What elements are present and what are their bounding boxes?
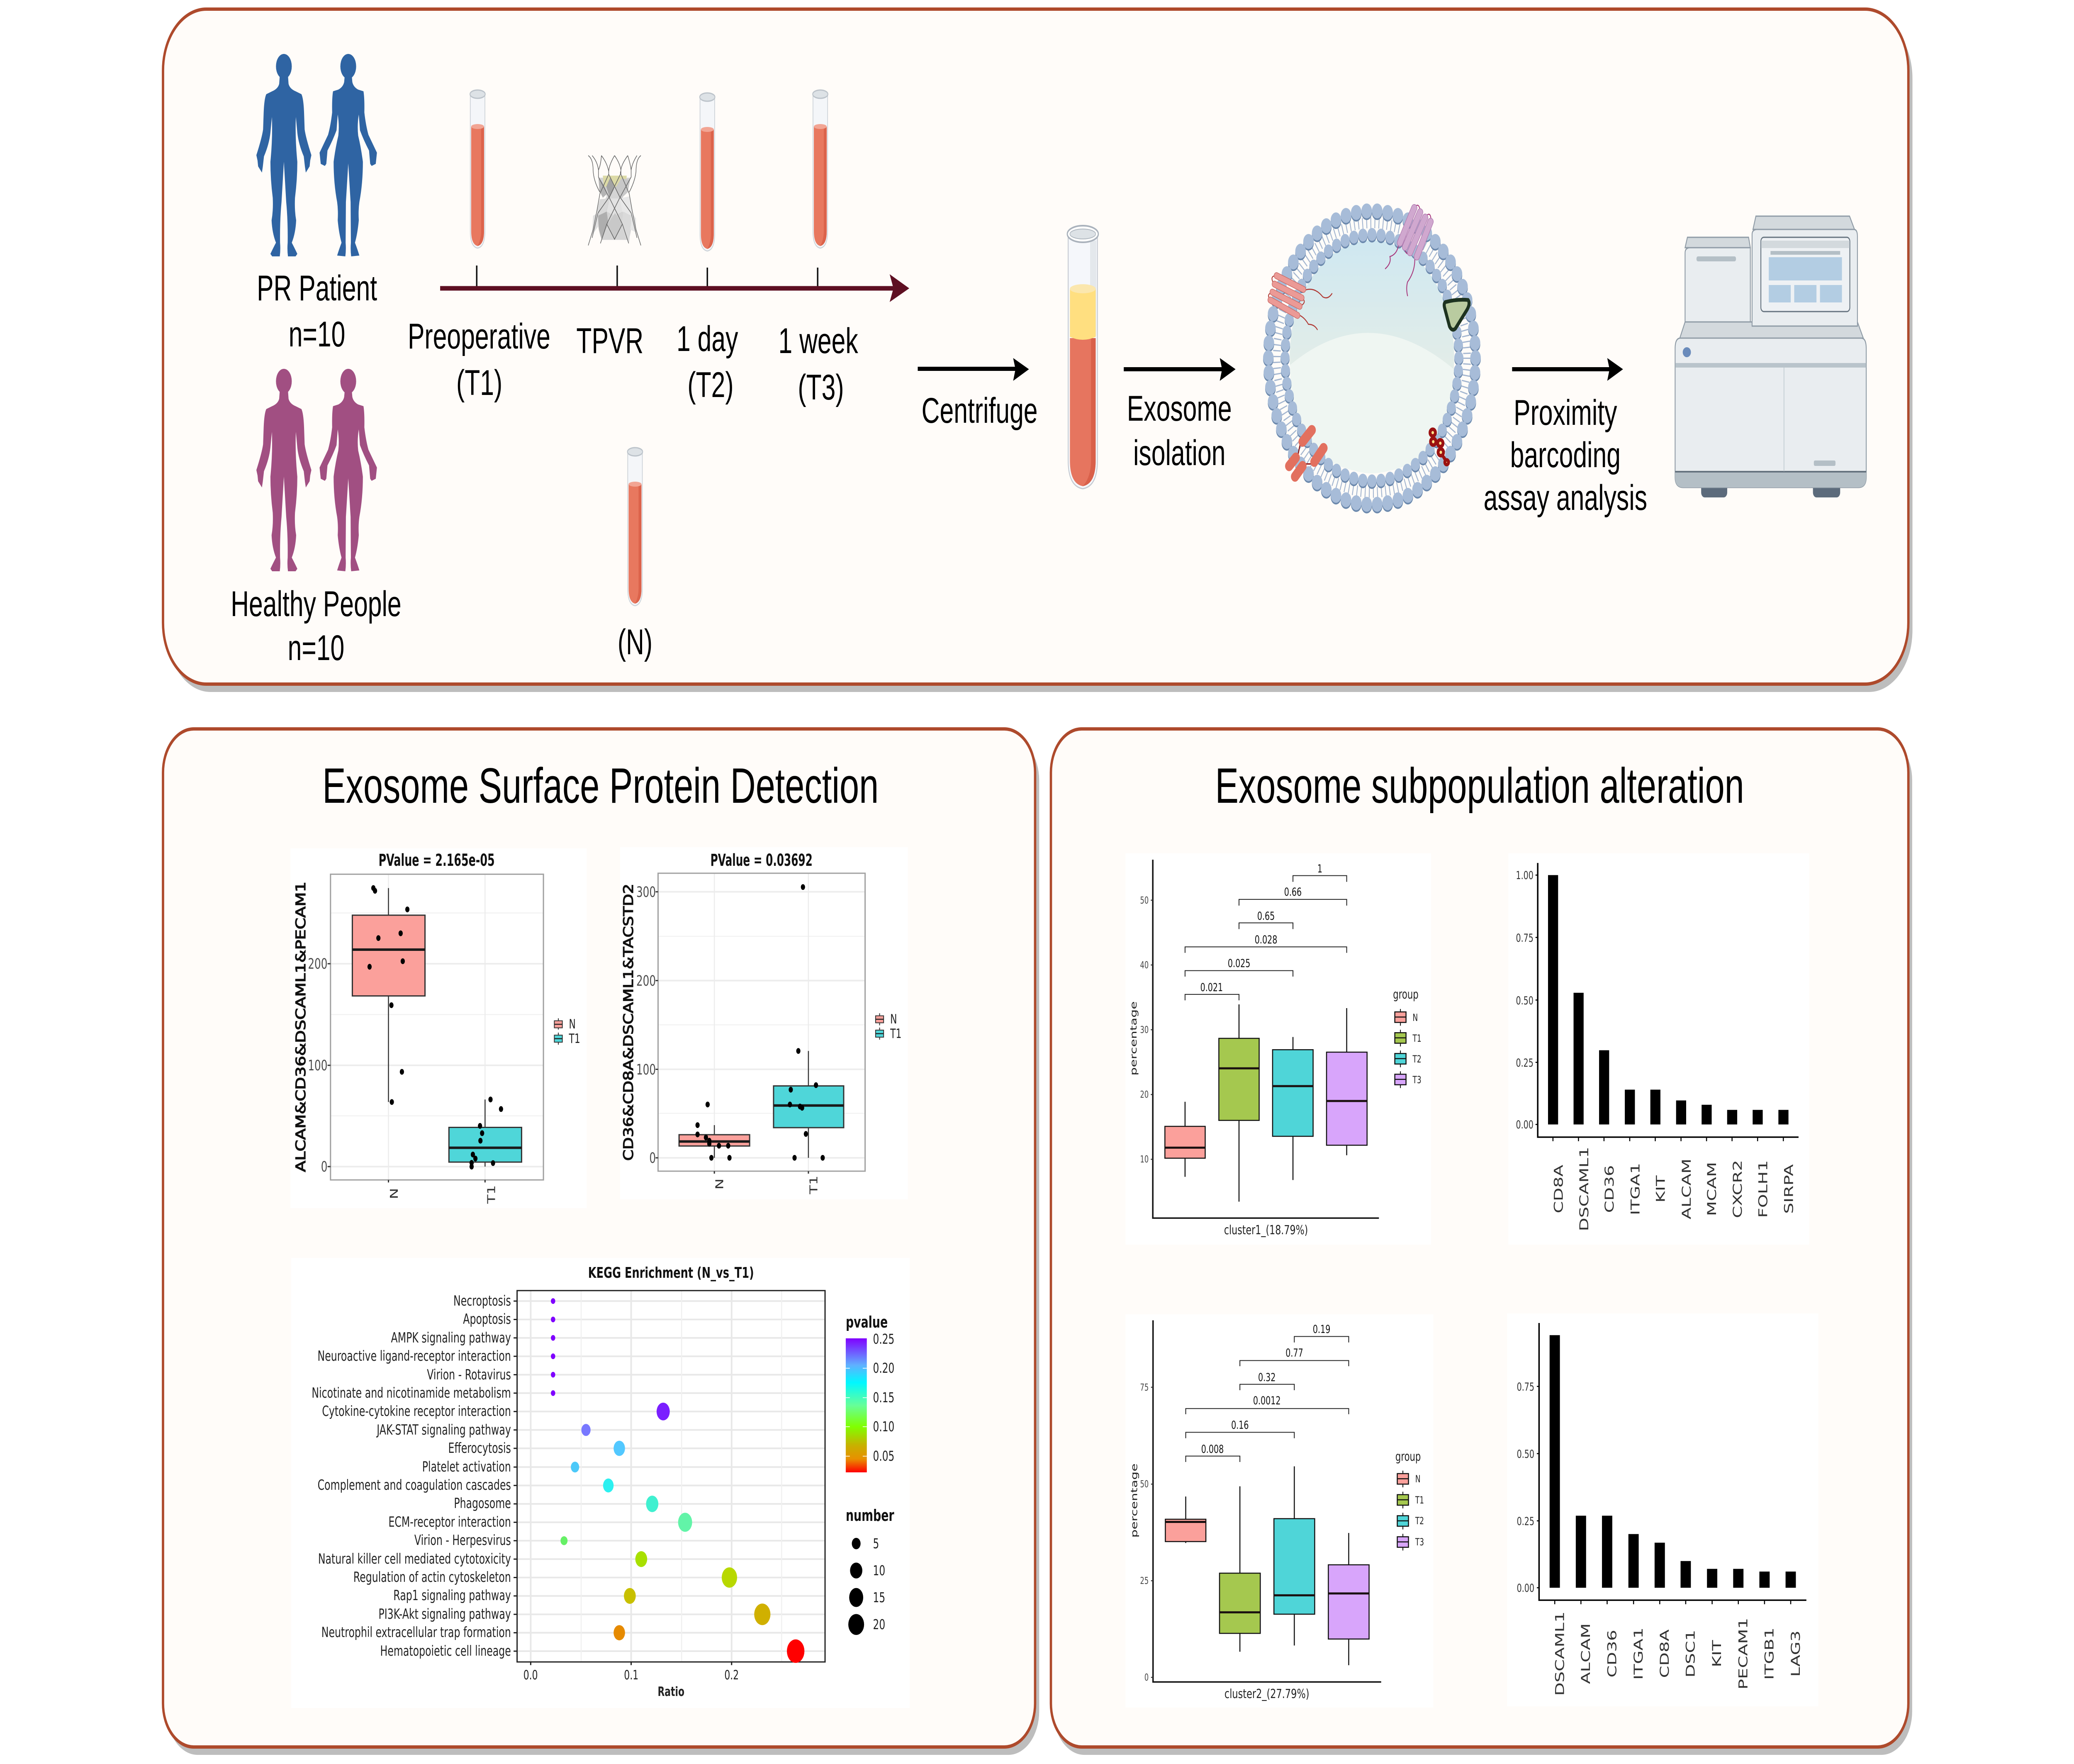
- chart: boxplot CD36&CD8A: [620, 847, 908, 1199]
- chart: cluster1 bar chart: 0.00: [1516, 1118, 1534, 1131]
- protein: pink transmembrane: [1385, 205, 1431, 296]
- chart: KEGG enrichment dot plot: Efferocytosis: [448, 1440, 511, 1456]
- chart: KEGG enrichment dot plot: JAK-STAT signaling pathway: [376, 1422, 511, 1438]
- chart: cluster1 boxplot: 20: [1140, 1089, 1149, 1100]
- timeline arrow: [440, 266, 909, 302]
- chart: boxplot ALCAM&CD36: ALCAM&CD36&DSCAML1&PECAM1: [293, 882, 309, 1172]
- chart: boxplot ALCAM&CD36: T1: [569, 1031, 580, 1046]
- chart: cluster2 boxplot: N: [1415, 1473, 1421, 1485]
- chart: cluster2 boxplot: percentage: [1130, 1464, 1139, 1538]
- heading: Exosome subpopulation alteration: [1215, 758, 1744, 814]
- label: PR Patient n=10: n=10: [289, 314, 345, 354]
- chart: boxplot CD36&CD8A: N: [714, 1179, 726, 1189]
- chart: boxplot ALCAM&CD36: PValue = 2.165e-05: [379, 851, 495, 870]
- chart: cluster1 bar chart: 1.00: [1516, 869, 1534, 882]
- label: Proximity barcoding assay analysis: barcoding: [1510, 435, 1621, 475]
- chart: cluster2 bar chart: KIT: [1709, 1640, 1724, 1667]
- timeline labels: (T2): [687, 365, 734, 404]
- chart: boxplot CD36&CD8A: 300: [636, 884, 656, 901]
- chart: cluster2 boxplot: 75: [1140, 1382, 1149, 1393]
- chart: KEGG enrichment dot plot: 0.25: [873, 1331, 894, 1347]
- chart: cluster2 boxplot: 0.008: [1201, 1442, 1224, 1456]
- chart: cluster2 bar chart: ITGB1: [1762, 1628, 1777, 1680]
- label: Exosome isolation: Exosome: [1127, 389, 1232, 428]
- chart: boxplot CD36&CD8A: T1: [890, 1026, 901, 1041]
- timeline labels: Preoperative: [408, 317, 550, 356]
- label: Healthy People n=10: n=10: [288, 628, 344, 668]
- chart: cluster1 bar chart: SIRPA: [1782, 1164, 1796, 1214]
- chart: KEGG enrichment dot plot: 0.2: [724, 1668, 739, 1683]
- chart: cluster2 boxplot: 25: [1140, 1575, 1149, 1586]
- chart: cluster2 bar chart: 0.75: [1517, 1380, 1534, 1394]
- heading: Exosome Surface Protein Detection: [322, 758, 879, 814]
- chart: KEGG enrichment dot plot: Phagosome: [454, 1495, 511, 1511]
- label: N group: (N): [618, 622, 652, 662]
- panel: Exosome subpopulation alteration: [1051, 729, 1912, 1755]
- chart: cluster1 boxplot: T3: [1412, 1074, 1422, 1086]
- chart: cluster1 boxplot: 0.021: [1200, 981, 1223, 994]
- chart: cluster1 boxplot: T2: [1412, 1053, 1422, 1065]
- chart: boxplot CD36&CD8A: 200: [636, 973, 656, 989]
- chart: cluster2 boxplot: [1125, 1314, 1434, 1708]
- chart: cluster1 boxplot: 0.028: [1255, 933, 1277, 946]
- chart: cluster1 bar chart: CXCR2: [1731, 1160, 1745, 1218]
- chart: cluster2 bar chart: DSCAML1: [1553, 1611, 1567, 1696]
- chart: cluster1 boxplot: 1: [1317, 862, 1322, 875]
- chart: KEGG enrichment dot plot: [291, 1258, 910, 1708]
- chart: KEGG enrichment dot plot: Ratio: [657, 1684, 684, 1699]
- chart: boxplot CD36&CD8A: 0: [649, 1150, 656, 1167]
- chart: cluster2 boxplot: 50: [1140, 1479, 1149, 1490]
- chart: boxplot ALCAM&CD36: 100: [308, 1057, 327, 1074]
- chart: cluster1 boxplot: 30: [1140, 1024, 1149, 1035]
- chart: KEGG enrichment dot plot: Cytokine-cytokine receptor interaction: [322, 1403, 511, 1419]
- chart: boxplot CD36&CD8A: N: [890, 1012, 897, 1027]
- chart: cluster1 bar chart: ITGA1: [1628, 1163, 1643, 1215]
- chart: KEGG enrichment dot plot: Virion - Rotavirus: [427, 1367, 511, 1383]
- chart: cluster2 boxplot: 0: [1144, 1672, 1149, 1683]
- chart: cluster2 bar chart: CD8A: [1657, 1629, 1672, 1678]
- chart: cluster1 bar chart: ALCAM: [1679, 1159, 1694, 1219]
- icon: PR patient figures: [256, 54, 377, 256]
- chart: cluster1 bar chart: CD36: [1602, 1165, 1617, 1213]
- chart: cluster2 bar chart: LAG3: [1788, 1630, 1803, 1677]
- chart: boxplot ALCAM&CD36: N: [388, 1188, 400, 1199]
- chart: KEGG enrichment dot plot: 10: [873, 1562, 885, 1579]
- chart: cluster1 boxplot: 40: [1140, 960, 1149, 971]
- chart: cluster2 bar chart: DSC1: [1683, 1630, 1698, 1677]
- chart: KEGG enrichment dot plot: 0.05: [873, 1448, 894, 1464]
- chart: boxplot ALCAM&CD36: T1: [486, 1185, 498, 1204]
- chart: cluster1 boxplot: N: [1413, 1012, 1418, 1023]
- chart: KEGG enrichment dot plot: ECM-receptor interaction: [388, 1514, 511, 1530]
- chart: cluster1 boxplot: cluster1_(18.79%): [1224, 1223, 1308, 1238]
- chart: KEGG enrichment dot plot: 0.15: [873, 1389, 894, 1406]
- label: Proximity barcoding assay analysis: assay analysis: [1484, 478, 1647, 517]
- timeline labels: [408, 317, 858, 407]
- chart: KEGG enrichment dot plot: Apoptosis: [463, 1311, 511, 1327]
- chart: cluster2 bar chart: PECAM1: [1736, 1618, 1750, 1689]
- label: Healthy People n=10: Healthy People: [231, 584, 402, 624]
- chart: cluster1 bar chart: CD8A: [1551, 1165, 1566, 1213]
- label: Exosome isolation: isolation: [1133, 433, 1226, 473]
- timeline labels: (T1): [456, 363, 502, 402]
- label: Proximity barcoding assay analysis: [1484, 393, 1647, 517]
- chart: KEGG enrichment dot plot: Natural killer cell mediated cytotoxicity: [318, 1551, 511, 1567]
- protein: red rods: [1289, 430, 1324, 477]
- icon: healthy people figures: [256, 369, 377, 571]
- timeline labels: TPVR: [576, 321, 643, 361]
- chart: boxplot ALCAM&CD36: 200: [308, 956, 327, 972]
- chart: cluster1 bar chart: 0.25: [1516, 1056, 1534, 1070]
- protein: green triangle: [1444, 300, 1469, 330]
- arrow: centrifuge: [918, 358, 1029, 381]
- chart: cluster2 boxplot: cluster2_(27.79%): [1224, 1687, 1309, 1701]
- icon: blood tube N: [628, 448, 643, 606]
- chart: cluster2 bar chart: 0.00: [1517, 1581, 1534, 1595]
- protein: salmon transmembrane: [1268, 275, 1332, 329]
- chart: KEGG enrichment dot plot: Complement and coagulation cascades: [318, 1477, 511, 1493]
- chart: cluster1 bar chart: 0.75: [1516, 931, 1534, 945]
- chart: boxplot CD36&CD8A: PValue = 0.03692: [711, 851, 813, 870]
- chart: cluster2 boxplot: 0.19: [1313, 1323, 1330, 1336]
- icon: blood tube T3: [813, 90, 828, 248]
- chart: cluster1 boxplot: 0.65: [1257, 909, 1275, 923]
- chart: KEGG enrichment dot plot: Virion - Herpesvirus: [414, 1532, 511, 1548]
- chart: KEGG enrichment dot plot: Regulation of actin cytoskeleton: [353, 1569, 511, 1585]
- chart: cluster2 bar chart: 0.50: [1517, 1447, 1534, 1461]
- protein: bead chain: [1430, 429, 1448, 465]
- chart: cluster2 boxplot: 0.77: [1285, 1346, 1303, 1360]
- label: Centrifuge: Centrifuge: [922, 391, 1038, 430]
- chart: cluster1 bar chart: MCAM: [1704, 1162, 1719, 1216]
- label: PR Patient n=10: [257, 268, 377, 354]
- chart: cluster1 bar chart: KIT: [1653, 1175, 1668, 1203]
- chart: KEGG enrichment dot plot: Nicotinate and nicotinamide metabolism: [312, 1385, 511, 1401]
- chart: cluster1 boxplot: percentage: [1129, 1001, 1139, 1076]
- chart: cluster2 boxplot: group: [1395, 1450, 1421, 1464]
- chart: cluster2 bar chart: [1507, 1313, 1818, 1706]
- chart: KEGG enrichment dot plot: Platelet activation: [422, 1459, 511, 1475]
- arrow: exosome isolation: [1124, 358, 1236, 381]
- chart: KEGG enrichment dot plot: 0.20: [873, 1360, 894, 1376]
- chart: cluster2 boxplot: 0.16: [1231, 1418, 1249, 1432]
- chart: cluster2 boxplot: T2: [1415, 1515, 1424, 1527]
- chart: KEGG enrichment dot plot: 5: [873, 1535, 879, 1552]
- chart: KEGG enrichment dot plot: Necroptosis: [453, 1293, 511, 1309]
- chart: KEGG enrichment dot plot: Neutrophil extracellular trap formation: [321, 1624, 511, 1640]
- chart: cluster2 bar chart: CD36: [1605, 1630, 1619, 1678]
- chart: boxplot CD36&CD8A: CD36&CD8A&DSCAML1&TACSTD2: [621, 884, 636, 1161]
- chart: cluster1 bar chart: DSCAML1: [1577, 1147, 1591, 1231]
- chart: cluster1 boxplot: 10: [1140, 1154, 1149, 1165]
- chart: cluster2 boxplot: T3: [1415, 1536, 1424, 1548]
- label: Proximity barcoding assay analysis: Proximity: [1514, 393, 1617, 432]
- chart: KEGG enrichment dot plot: 0.1: [624, 1668, 638, 1683]
- chart: cluster1 boxplot: group: [1393, 987, 1419, 1002]
- chart: cluster2 boxplot: T1: [1415, 1494, 1424, 1506]
- chart: boxplot ALCAM&CD36: N: [569, 1017, 576, 1032]
- chart: cluster1 boxplot: 0.025: [1228, 957, 1250, 970]
- timeline labels: 1 day: [677, 319, 738, 358]
- chart: cluster2 bar chart: ALCAM: [1578, 1623, 1593, 1684]
- chart: boxplot CD36&CD8A: T1: [808, 1176, 820, 1195]
- chart: cluster2 bar chart: ITGA1: [1631, 1628, 1646, 1680]
- arrow: proximity barcoding: [1512, 358, 1623, 381]
- chart: cluster1 bar chart: 0.50: [1516, 994, 1534, 1007]
- chart: cluster2 boxplot: 0.32: [1258, 1371, 1276, 1384]
- icon: analyzer instrument: [1675, 216, 1866, 497]
- panel: study design workflow: [163, 9, 1913, 692]
- chart: KEGG enrichment dot plot: pvalue: [846, 1313, 888, 1331]
- chart: KEGG enrichment dot plot: number: [846, 1506, 894, 1525]
- icon: blood tube T1: [470, 90, 485, 248]
- chart: cluster1 boxplot: T1: [1412, 1033, 1422, 1044]
- chart: cluster2 bar chart: 0.25: [1517, 1515, 1534, 1528]
- chart: cluster1 boxplot: 50: [1140, 895, 1149, 906]
- timeline labels: (T3): [798, 368, 844, 407]
- chart: boxplot ALCAM&CD36: 0: [321, 1159, 327, 1175]
- panel: Exosome Surface Protein Detection: [163, 729, 1039, 1755]
- label: PR Patient n=10: PR Patient: [257, 268, 377, 308]
- chart: KEGG enrichment dot plot: Neuroactive ligand-receptor interaction: [318, 1348, 511, 1364]
- chart: cluster1 bar chart: FOLH1: [1756, 1160, 1770, 1218]
- label: Exosome isolation: [1127, 389, 1232, 473]
- chart: KEGG enrichment dot plot: KEGG Enrichment (N_vs_T1): [588, 1265, 754, 1282]
- chart: boxplot ALCAM&CD36: [291, 848, 587, 1208]
- timeline labels: 1 week: [779, 321, 858, 361]
- chart: KEGG enrichment dot plot: Rap1 signaling pathway: [393, 1587, 511, 1603]
- chart: cluster1 bar chart: [1508, 853, 1809, 1245]
- label: Healthy People n=10: [231, 584, 402, 668]
- chart: KEGG enrichment dot plot: Hematopoietic cell lineage: [380, 1643, 511, 1659]
- chart: cluster2 boxplot: 0.0012: [1253, 1394, 1281, 1407]
- icon: blood tube T2: [700, 93, 715, 251]
- chart: KEGG enrichment dot plot: AMPK signaling pathway: [391, 1330, 511, 1346]
- icon: centrifuged blood tube: [1067, 226, 1098, 489]
- chart: cluster1 boxplot: [1125, 853, 1431, 1245]
- chart: KEGG enrichment dot plot: 15: [873, 1589, 885, 1606]
- chart: KEGG enrichment dot plot: PI3K-Akt signaling pathway: [378, 1606, 511, 1622]
- icon: TPVR valve stent: [588, 156, 641, 246]
- icon: exosome vesicle: [1268, 205, 1475, 506]
- chart: KEGG enrichment dot plot: 0.10: [873, 1418, 894, 1435]
- chart: KEGG enrichment dot plot: 20: [873, 1616, 885, 1632]
- chart: boxplot CD36&CD8A: 100: [636, 1062, 656, 1078]
- chart: cluster1 boxplot: 0.66: [1284, 885, 1302, 899]
- chart: KEGG enrichment dot plot: 0.0: [523, 1668, 538, 1683]
